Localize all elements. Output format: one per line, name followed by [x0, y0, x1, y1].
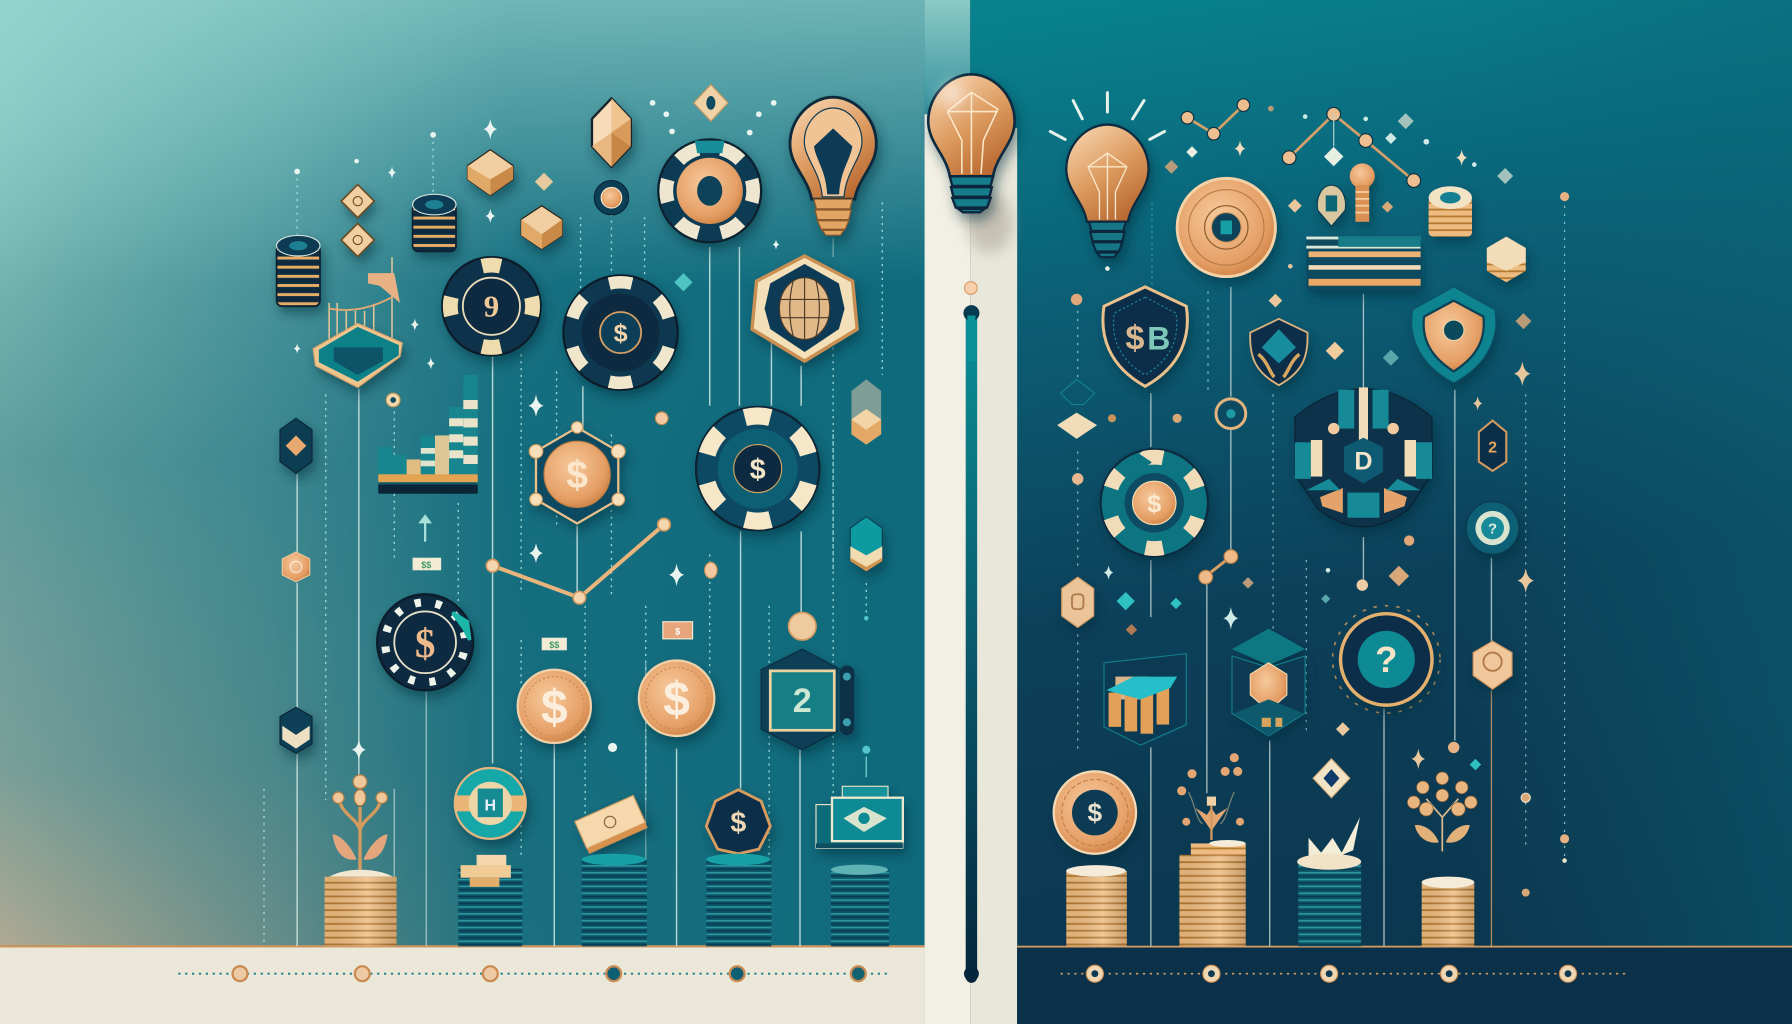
icon: outlined and cream diamonds: [1057, 379, 1097, 439]
icon: zigzag chart: [1309, 817, 1360, 859]
connector lines: right panel: [1151, 202, 1491, 946]
icon: small diamond tokens: [341, 185, 374, 257]
icon: poker chip dollar large: [550, 262, 692, 404]
icon: gold coin stack: [1429, 186, 1472, 237]
icon: teal spiral coin: [1466, 502, 1519, 554]
arrow marker: [418, 514, 432, 542]
small tags: $: [675, 626, 680, 636]
icon: chip stack 2: [413, 194, 456, 251]
line chart: small top: [1181, 99, 1250, 140]
icon: small hex badge: [1479, 421, 1506, 471]
connector nodes: [705, 562, 717, 578]
icon: hexagon coin with nodes: $: [566, 454, 588, 497]
icon: hex box frame: [1232, 629, 1305, 736]
icon: teal coin: [455, 768, 526, 839]
icon: teal and gold hex token: [850, 517, 882, 571]
center slot bar: [963, 305, 979, 983]
icon: gold hex token: [1473, 641, 1512, 689]
connector line accent: [1199, 192, 1569, 897]
timeline markers: [233, 966, 866, 981]
icon: dollar shield badge: $: [1125, 320, 1144, 358]
icon: copper dollar coin 2: [639, 661, 714, 736]
icon: dollar coin large: $: [1088, 798, 1103, 828]
coin stack: teal with gold pile: [458, 855, 522, 946]
icon: hex emblem: [1250, 319, 1308, 385]
icon: plant sprout: [333, 775, 387, 871]
connector node: [655, 412, 668, 425]
line chart: peak top: [1282, 107, 1421, 187]
background: light teal left panel: [0, 0, 970, 1024]
footer timeline: left: [178, 966, 891, 981]
center connector dot: [965, 282, 977, 294]
icon: key coin: [1350, 163, 1375, 222]
icon: cream hex badge: [1062, 577, 1094, 627]
icon: dollar coin large: [1054, 771, 1136, 854]
icon: grey and gold hex token: [851, 379, 881, 445]
icon: cash bundle: [575, 795, 648, 854]
icon: small coin on line: [282, 552, 310, 582]
icon: small diamond with dot: [694, 85, 728, 121]
icon: chip with copper centre: [657, 138, 763, 244]
bottom band: right dark footer: [1017, 947, 1792, 1024]
icon: gold cube 1: [467, 150, 513, 195]
icon: number 2 panel: [761, 649, 855, 750]
timeline markers: [1086, 965, 1577, 982]
icon: gold hex coin: [1487, 237, 1526, 282]
icon: copper dollar coin 2: $: [663, 673, 690, 726]
icon: small coin: [594, 181, 629, 215]
icon: striped server bars: [1306, 237, 1421, 290]
coin stack: teal right: [1297, 854, 1361, 946]
icon: ring node: [1216, 399, 1246, 429]
icon: sparkle dots top: [294, 100, 870, 760]
coin stack: gold right 1: [1066, 865, 1127, 946]
coin stack: teal 4: [831, 865, 889, 946]
icon: large mechanical chip: [1295, 387, 1432, 527]
icon: large mechanical chip: D: [1354, 448, 1373, 476]
icon: poker chip dollar teal: [694, 405, 821, 532]
icon: poker chip dollar large: $: [614, 320, 628, 348]
icon: pin above panel: [789, 613, 816, 640]
icon: hex token cream chevron: [280, 707, 312, 753]
icon: 3D box of stacks: [1104, 654, 1186, 745]
icon: poker chip 9: 9: [484, 290, 499, 324]
icon: hexagon coin with nodes: [529, 422, 625, 523]
icon: copper dollar coin 1: $: [541, 681, 568, 734]
coin stack: teal 3: [706, 854, 771, 946]
small tags: $$: [421, 560, 431, 570]
icon: small hex badge: 2: [1488, 440, 1497, 457]
coin stack: gold right 2: [1179, 840, 1246, 946]
icon: teal shield copper badge: [1412, 287, 1496, 383]
icon: gold cube 2: [521, 206, 562, 249]
dashed connector lines: left panel: [264, 135, 882, 943]
icon: fence and teal platform: [313, 257, 402, 387]
icon: teal platform: [313, 323, 402, 387]
coin stack: gold right 3: [1422, 877, 1474, 946]
icon: hexagonal globe badge: [752, 256, 857, 361]
bottom band: left cream footer: [0, 946, 925, 1024]
icon: large copper dial coin: [1177, 178, 1275, 277]
icon: poker chip 9: [442, 257, 541, 356]
icon: question mark medallion: [1333, 606, 1440, 713]
coin stack: gold left: [325, 870, 397, 946]
footer rule lines: [0, 945, 1792, 948]
line chart: [486, 518, 670, 604]
icon: poker chip dollar dark: $: [415, 620, 435, 666]
bar chart: [378, 375, 478, 494]
icon: faceted gem: [592, 98, 631, 167]
icon: teal spiral coin: ?: [1488, 522, 1497, 538]
icon: hex token dark: [280, 418, 312, 473]
background: dark teal right panel: [970, 0, 1792, 1024]
icon: dollar shield badge: [1103, 287, 1187, 386]
dashed connector lines: right panel: [1078, 206, 1565, 857]
central cream divider strip: [925, 114, 1017, 1024]
icon: blossom plant: [1407, 772, 1477, 851]
icon: teal coin: H: [485, 797, 496, 814]
small tags: $$: [549, 640, 559, 650]
icon: poker chip teal copper: [1101, 449, 1208, 557]
footer timeline: right: [1061, 965, 1625, 982]
icon: dollar shield badge: B: [1147, 321, 1170, 357]
icon: poker chip dollar teal: $: [750, 454, 766, 486]
icon: sparkles and dots right top: [1071, 106, 1534, 770]
connector lines: left panel: [297, 238, 866, 946]
icon: hex dollar badge: [706, 790, 770, 854]
icon: poker chip teal copper: $: [1147, 490, 1161, 518]
icon: copper dollar coin 1: [518, 670, 591, 743]
icon: poker chip dollar dark: [376, 593, 474, 691]
coin stack: teal 2: [582, 854, 647, 946]
icon: question mark medallion: ?: [1375, 639, 1397, 680]
icon: stack of banknotes: [816, 786, 903, 848]
icon: map pin: [1317, 185, 1346, 226]
icon: light bulb left panel: [790, 97, 876, 235]
icon: light bulb with rays: [1050, 93, 1165, 257]
icon: chip stack 1: [277, 235, 320, 306]
icon: center light bulb: [928, 74, 1015, 212]
icon: arrow sprout: [1177, 753, 1244, 840]
icon: small pin: [386, 393, 400, 407]
icon: hex dollar badge: $: [730, 807, 746, 839]
icon: number 2 panel: 2: [793, 682, 812, 720]
small tags: [413, 558, 693, 650]
icon: diamond above zigzag: [1313, 759, 1350, 798]
